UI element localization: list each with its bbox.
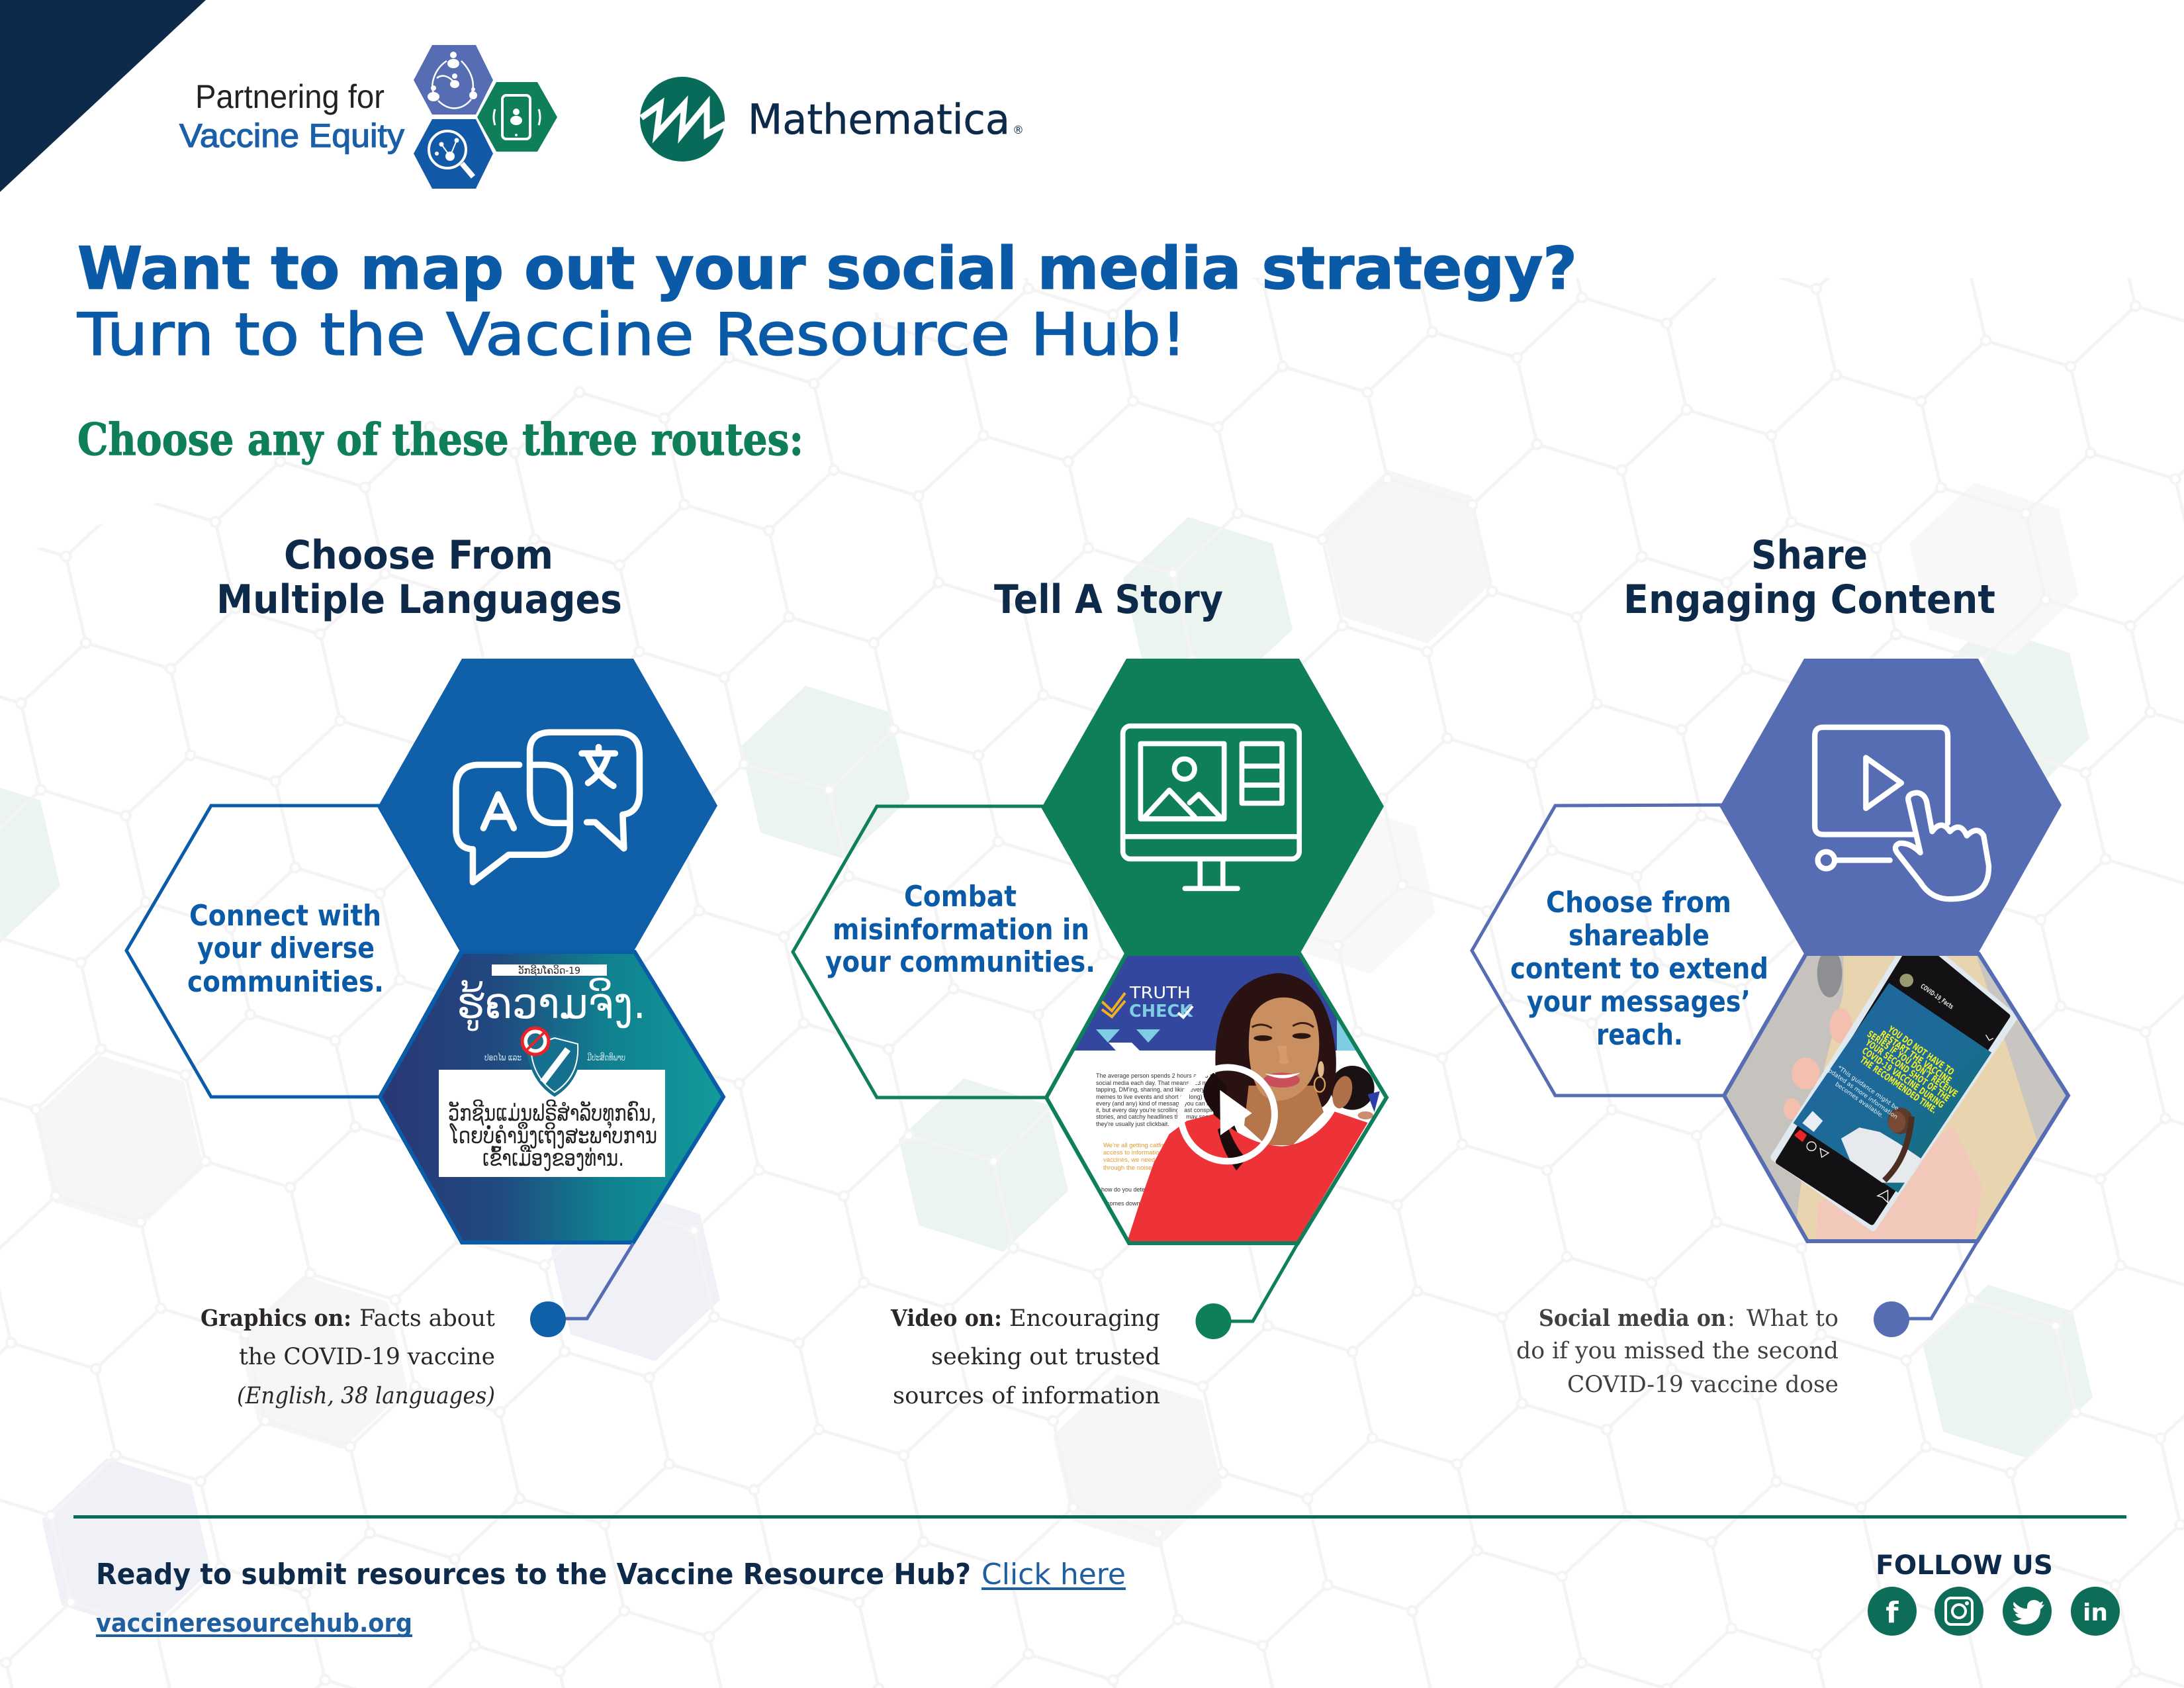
connector with dot [1874, 1241, 1978, 1337]
logo: Partnering for Vaccine Equity [179, 45, 557, 189]
outlined hexagon with message: your messages’ [1527, 985, 1751, 1019]
image: video still with play button: We're all getting catfished [1103, 1142, 1175, 1149]
panel heading: Choose From [284, 532, 553, 579]
icon: network hexagon [414, 45, 493, 115]
image: Lao vaccine graphic: ວັກຊີນໂຄວິດ-19 [518, 964, 580, 976]
outlined hexagon with message: your diverse [197, 931, 375, 965]
icon: instagram [1934, 1587, 1983, 1636]
image: Lao vaccine graphic: ມີປະສິດທິພາບ [587, 1053, 625, 1063]
outlined hexagon with message: shareable [1569, 919, 1709, 953]
connector with dot [530, 1243, 633, 1337]
link: click here: Click here [981, 1558, 1126, 1591]
icon: facebook: f [1886, 1596, 1899, 1630]
image: phone with social media post: becomes available. [1834, 1081, 1885, 1119]
caption: video: Encouraging [1009, 1305, 1160, 1332]
panel heading [1623, 532, 1995, 623]
panel: shareable content [1472, 532, 2071, 1398]
icon: Mathematica mark [640, 77, 725, 162]
panel heading [216, 532, 622, 623]
icon: phone hexagon [477, 82, 557, 152]
icon: facebook [1868, 1587, 1917, 1636]
image: Lao vaccine graphic: ປອດໄພ ແລະ [484, 1053, 522, 1063]
image: phone with social media post: COVID-19_Facts [1919, 983, 1954, 1011]
icon: translation speech bubbles [379, 659, 717, 952]
panel: story [793, 577, 1390, 1409]
icon: computer monitor [1042, 659, 1384, 954]
caption: social media: COVID-19 vaccine dose [1567, 1372, 1839, 1398]
icon: video with pointing hand [1721, 659, 2062, 953]
image: video still with play button: vaccines, we need to cut [1103, 1156, 1172, 1164]
image: phone with social media post: COVID-19 VACCINE DURING [1860, 1046, 1946, 1111]
outlined hexagon with message [793, 806, 1126, 1098]
caption: video: Video on: [890, 1305, 1002, 1332]
wordmark: Mathematica [748, 95, 1010, 144]
outlined hexagon with message: content to extend [1510, 952, 1768, 986]
image: phone with social media post: RESTART THE VACCINE [1878, 1029, 1953, 1086]
caption: graphics: Graphics on: [201, 1305, 351, 1332]
image: phone with social media post: THE RECOMMENDED TIME. [1858, 1055, 1938, 1116]
image: video still with play button: through the noise and [1103, 1164, 1164, 1172]
image: phone with social media post: SERIES IF YOU DON'T RECEIVE [1865, 1029, 1960, 1100]
follow us [1868, 1550, 2120, 1636]
image: video still with play button: The average person spends 2 hours and 3 minutes on [1096, 1072, 1239, 1079]
logo text [179, 78, 404, 154]
panel: languages [126, 532, 728, 1409]
image: Lao vaccine graphic [377, 950, 728, 1244]
caption: social media: do if you missed the second [1516, 1338, 1839, 1364]
footer: submit call to action: Ready to submit resources to the Vaccine Resource Hub? [96, 1558, 971, 1591]
corner triangle [0, 0, 206, 192]
footer rule [73, 1515, 2126, 1519]
image: phone with social media post: *This guidance might be [1836, 1065, 1900, 1112]
icon: magnifier hexagon [414, 119, 493, 189]
image: video still with play button: memes to live events and short (or long) videos, and [1096, 1094, 1234, 1100]
outlined hexagon with message: Connect with [189, 899, 381, 933]
caption: social media: Social media on [1539, 1305, 1726, 1332]
image: video still with play button: it, but every day you're scrolling past conspiracy theories, [1096, 1107, 1247, 1113]
caption: video: seeking out trusted [931, 1344, 1160, 1370]
caption: graphics: the COVID-19 vaccine [239, 1344, 495, 1370]
title [77, 234, 1577, 369]
image: phone with social media post: YOU DO NOT HAVE TO [1886, 1024, 1956, 1078]
image: video still with play button: they're usually just clickbait. [1096, 1121, 1169, 1127]
image: video still with play button: social media each day. That means 123 minutes of [1096, 1080, 1230, 1086]
outlined hexagon with message: Combat [904, 880, 1017, 914]
routes subheading: Choose any of these three routes: [77, 414, 803, 465]
image: video still with play button: CHECK [1129, 1002, 1193, 1021]
image: phone with social media post: YOUR SECOND SHOT OF THE [1863, 1037, 1952, 1104]
caption: video [890, 1305, 1160, 1409]
registered mark: ® [1013, 124, 1024, 137]
outlined hexagon with message: communities. [187, 965, 384, 999]
image: video still with play button: comes down to spot [1107, 1200, 1160, 1207]
outlined hexagon with message: misinformation in [833, 913, 1089, 947]
title line 2: Turn to the Vaccine Resource Hub! [77, 301, 1187, 369]
icon: linkedin [2071, 1587, 2120, 1636]
caption: video: sources of information [893, 1383, 1160, 1409]
image: video still with play button: every (and any) kind of message you can imagine. You [1096, 1100, 1241, 1107]
panel heading: Engaging Content [1623, 577, 1995, 623]
panel heading: Tell A Story [994, 577, 1223, 623]
panel heading: Multiple Languages [216, 577, 622, 623]
icon: linkedin: in [2083, 1599, 2108, 1626]
image: video still with play button: tapping, DM'ing, sharing, and liking everything from [1096, 1086, 1231, 1093]
logo text: Partnering for [195, 78, 385, 115]
outlined hexagon with message: Choose from [1546, 886, 1731, 919]
image: Lao vaccine graphic: ຮູ້ຄວາມຈິງ. [457, 977, 646, 1031]
image: video still with play button: access to information about [1103, 1149, 1181, 1156]
image: video still with play button: how do you determine [1101, 1186, 1160, 1193]
caption: graphics [201, 1305, 495, 1409]
image: Lao vaccine graphic: ໂດຍບໍ່ຄຳນຶງເຖິງສະພາບການ [449, 1122, 657, 1149]
title line 1: Want to map out your social media strategy? [77, 234, 1577, 303]
logo: Mathematica [640, 77, 1024, 162]
image: phone with social media post [1720, 933, 2071, 1244]
icon: twitter [2003, 1587, 2052, 1636]
outlined hexagon with message: reach. [1596, 1018, 1683, 1052]
outlined hexagon with message [126, 806, 461, 1097]
caption: social media: : [1727, 1305, 1735, 1332]
caption: graphics: Facts about [359, 1305, 495, 1332]
caption: social media: What to [1747, 1305, 1839, 1332]
caption: social media [1516, 1305, 1839, 1398]
image: phone with social media post: updated as more information [1823, 1066, 1899, 1121]
image: Lao vaccine graphic: ວັກຊີນແມ່ນຟຣີສຳລັບທຸກຄົນ, [448, 1100, 657, 1129]
link: website: vaccineresourcehub.org [96, 1609, 412, 1638]
logo text: Vaccine Equity [179, 117, 404, 154]
image: Lao vaccine graphic: ເຂົ້າເມືອງຂອງທ່ານ. [482, 1145, 624, 1172]
outlined hexagon with message [1472, 805, 1806, 1096]
image: video still with play button: stories, and catchy headlines that may seem true, but [1096, 1113, 1238, 1120]
outlined hexagon with message: your communities. [825, 945, 1095, 979]
caption: graphics: (English, 38 languages) [237, 1383, 495, 1409]
image: video still with play button [1042, 952, 1390, 1246]
connector with dot [1195, 1243, 1298, 1339]
image: video still with play button: TRUTH [1129, 983, 1191, 1002]
panel heading: Share [1751, 532, 1868, 579]
follow us heading: FOLLOW US [1876, 1550, 2053, 1581]
